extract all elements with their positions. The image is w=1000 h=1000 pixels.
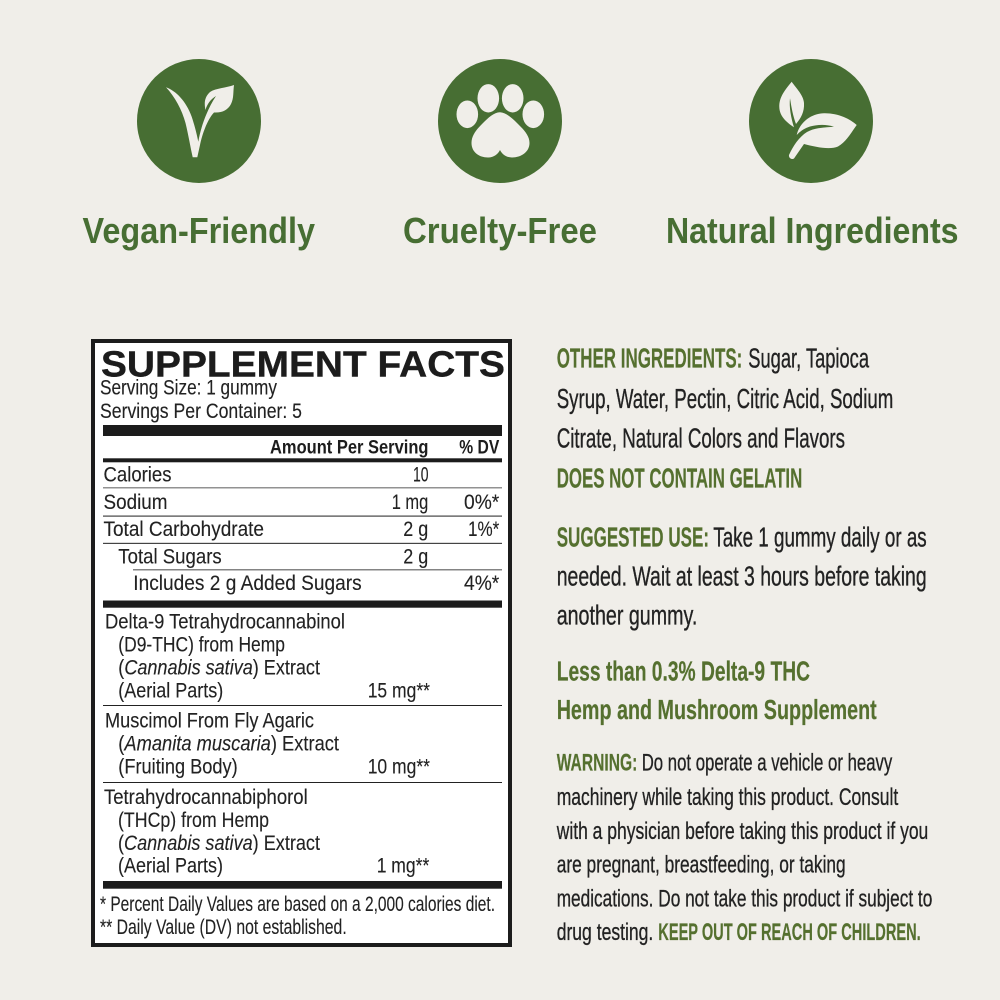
text block: THC statement: Hemp and Mushroom Supplement xyxy=(557,694,877,725)
text block: warning: WARNING: xyxy=(557,750,637,777)
ingredient: delta-9 THC: (Aerial Parts) xyxy=(118,680,223,703)
icon: natural leaves xyxy=(749,59,873,183)
text block: other ingredients xyxy=(557,343,893,493)
ingredient: delta-9 THC: (Cannabis sativa) Extract xyxy=(118,656,320,679)
text block: warning xyxy=(556,750,932,946)
text block: warning: are pregnant, breastfeeding, or taking xyxy=(557,852,846,879)
row: total sugars: 2 g xyxy=(403,545,428,568)
title: supplement facts: SUPPLEMENT FACTS xyxy=(101,344,505,385)
text block: THC statement xyxy=(557,656,877,725)
ingredient: THCp: (Aerial Parts) xyxy=(118,855,223,878)
text block: other ingredients: DOES NOT CONTAIN GELATIN xyxy=(557,462,802,493)
serving information: Serving Size: 1 gummy xyxy=(100,376,277,399)
icon: vegan leaf V xyxy=(137,59,261,183)
ingredient: delta-9 THC xyxy=(105,610,430,703)
ingredient: delta-9 THC: Delta-9 Tetrahydrocannabinol xyxy=(105,610,345,633)
ingredient: THCp: (Cannabis sativa) Extract xyxy=(118,832,320,855)
icon: paw print xyxy=(438,59,562,183)
ingredient: muscimol: (Fruiting Body) xyxy=(118,755,238,778)
text block: other ingredients: Sugar, Tapioca xyxy=(748,343,869,374)
ingredient: THCp: 1 mg** xyxy=(377,855,429,878)
footnotes: ** Daily Value (DV) not established. xyxy=(100,916,347,939)
row: added sugars xyxy=(133,572,499,595)
row: total carbohydrate xyxy=(104,518,499,541)
ingredient: delta-9 THC: 15 mg** xyxy=(368,680,430,703)
ingredient: muscimol: Muscimol From Fly Agaric xyxy=(105,709,314,732)
row: sodium: Sodium xyxy=(104,491,168,514)
table header: Amount Per Serving xyxy=(270,437,428,458)
row: sodium: 1 mg xyxy=(392,491,428,514)
heading: Natural Ingredients: Natural Ingredients xyxy=(666,210,958,251)
row: total carbohydrate: 2 g xyxy=(403,518,428,541)
ingredient: muscimol: (Amanita muscaria) Extract xyxy=(118,732,339,755)
row: sodium xyxy=(104,491,499,514)
ingredient: muscimol: 10 mg** xyxy=(368,755,430,778)
text block: warning: drug testing. xyxy=(557,919,653,946)
ingredient: THCp xyxy=(104,786,429,878)
row: total sugars xyxy=(118,545,428,568)
row: added sugars: 4%* xyxy=(464,572,499,595)
row: sodium: 0%* xyxy=(464,491,499,514)
serving information: Servings Per Container: 5 xyxy=(100,400,302,423)
row: calories xyxy=(104,464,428,487)
row: added sugars: Includes 2 g Added Sugars xyxy=(133,572,362,595)
row: total carbohydrate: Total Carbohydrate xyxy=(104,518,264,541)
text block: THC statement: Less than 0.3% Delta-9 THC xyxy=(557,656,810,687)
text block: suggested use: SUGGESTED USE: xyxy=(557,522,709,553)
row: total carbohydrate: 1%* xyxy=(468,518,499,541)
row: calories: Calories xyxy=(104,464,172,487)
serving information xyxy=(100,376,302,423)
text block: suggested use xyxy=(557,522,927,630)
text block: suggested use: another gummy. xyxy=(557,599,697,630)
heading: Vegan-Friendly: Vegan-Friendly xyxy=(82,210,315,251)
heading: Cruelty-Free: Cruelty-Free xyxy=(403,210,597,251)
ingredient: delta-9 THC: (D9-THC) from Hemp xyxy=(118,634,285,657)
ingredient: THCp: Tetrahydrocannabiphorol xyxy=(104,786,308,809)
footnotes: * Percent Daily Values are based on a 2,000 calories diet. xyxy=(100,893,495,916)
ingredient: muscimol xyxy=(105,709,430,778)
ingredient: THCp: (THCp) from Hemp xyxy=(118,809,269,832)
panel: supplement facts xyxy=(93,341,510,945)
row: calories: 10 xyxy=(413,464,428,487)
row: total sugars: Total Sugars xyxy=(118,545,222,568)
footnotes xyxy=(100,893,495,939)
text block: warning: Do not operate a vehicle or heavy xyxy=(642,750,892,777)
text block: other ingredients: OTHER INGREDIENTS: xyxy=(557,343,742,374)
table header: % DV xyxy=(459,437,500,458)
text block: other ingredients: Citrate, Natural Colors and Flavors xyxy=(557,423,845,454)
